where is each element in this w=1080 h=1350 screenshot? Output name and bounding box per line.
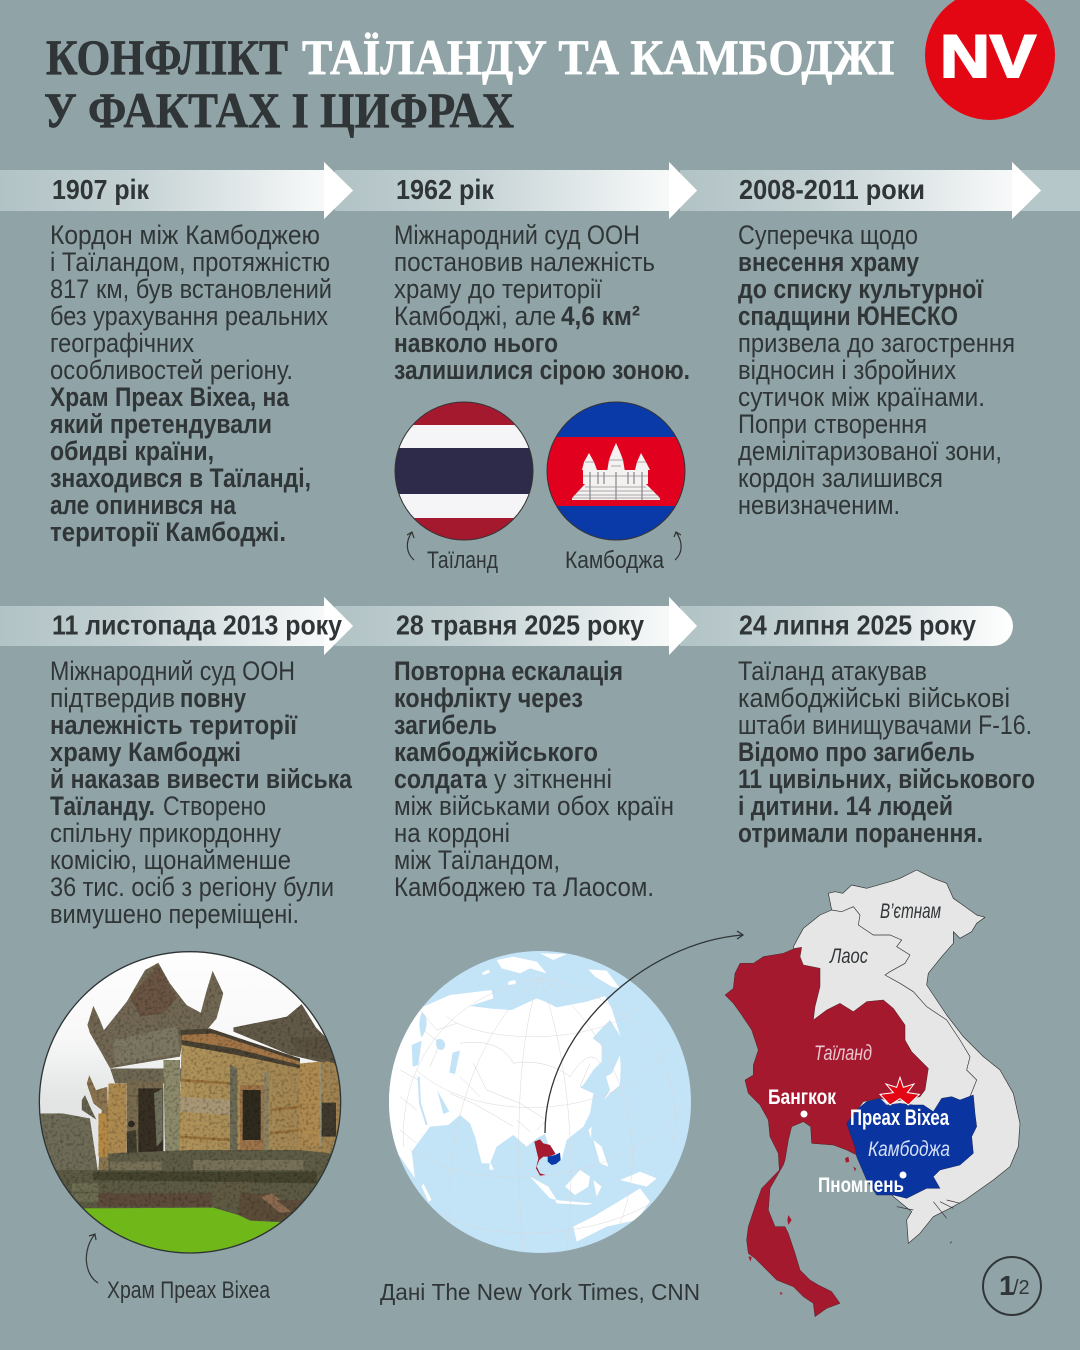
title bbox=[44, 29, 895, 138]
text block: 1907: Кордон між Камбоджею bbox=[50, 220, 320, 250]
timeline arrows row 2 bbox=[0, 597, 1013, 655]
text block: 2013: Таїланду. bbox=[50, 791, 155, 821]
text block: 2013: Створено bbox=[163, 791, 266, 821]
logo: NV bbox=[925, 0, 1055, 120]
text block: 2013: Міжнародний суд ООН bbox=[50, 656, 295, 686]
text block: 2013: повну bbox=[180, 683, 246, 713]
caption: Cambodia: Камбоджа bbox=[565, 547, 665, 574]
text block: 2008-2011: Суперечка щодо bbox=[738, 220, 918, 250]
text block: July 2025: 11 цивільних, військового bbox=[738, 764, 1035, 794]
text block: 1907: але опинився на bbox=[50, 490, 237, 520]
text block: 1907: 817 км, був встановлений bbox=[50, 274, 332, 304]
page number bbox=[983, 1257, 1041, 1315]
text block: 2008-2011: невизначеним. bbox=[738, 490, 900, 520]
text block: 2013: належність території bbox=[50, 710, 298, 740]
labels on map: Таїланд bbox=[814, 1042, 872, 1065]
text block: 2008-2011: призвела до загострення bbox=[738, 328, 1015, 358]
panel: 1907 bbox=[49, 174, 332, 547]
text block: 2008-2011: кордон залишився bbox=[738, 463, 943, 493]
photo: Preah Vihear temple bbox=[38, 951, 342, 1254]
text block: May 2025: між військами обох країн bbox=[394, 791, 674, 821]
page number: 1 bbox=[999, 1270, 1015, 1301]
labels on map bbox=[768, 900, 950, 1197]
page number: /2 bbox=[1013, 1277, 1030, 1299]
islands bbox=[422, 1055, 657, 1242]
caption: Thailand bbox=[407, 532, 498, 574]
right roof bbox=[233, 1004, 338, 1067]
panel: 24 July 2025 bbox=[738, 610, 1035, 848]
land: Eurasia and Africa bbox=[383, 990, 621, 1178]
caption: Cambodia bbox=[565, 532, 681, 574]
text block: 1962: Міжнародний суд ООН bbox=[394, 220, 640, 250]
text block: 1907: знаходився в Таїланді, bbox=[50, 463, 311, 493]
islands bbox=[748, 1157, 856, 1295]
arrow: Cambodia bbox=[674, 532, 681, 560]
text block: 1907: який претендували bbox=[49, 409, 272, 439]
text block: 1907: без урахування реальних bbox=[50, 301, 328, 331]
heading: 1907: 1907 рік bbox=[52, 174, 150, 205]
logo: NV: NV bbox=[940, 23, 1036, 90]
text block: 2013 bbox=[50, 656, 353, 929]
panel: 1962 bbox=[394, 174, 690, 385]
Red Sea bbox=[419, 1077, 427, 1125]
labels on map: Лаос bbox=[828, 945, 868, 968]
text block: May 2025: Повторна ескалація bbox=[394, 656, 623, 686]
panel: 11 November 2013 bbox=[50, 610, 353, 929]
text block: 2008-2011: сутичок між країнами. bbox=[738, 382, 985, 412]
text block: 2008-2011: Попри створення bbox=[738, 409, 927, 439]
panel: 2008-2011 bbox=[738, 174, 1015, 520]
labels on map: Бангкок bbox=[768, 1086, 836, 1109]
text block: 2013: комісію, щонайменше bbox=[50, 845, 291, 875]
text block: 2013: підтвердив bbox=[50, 683, 175, 713]
caption: temple: Храм Преах Віхеа bbox=[107, 1277, 271, 1304]
text block: 1907: обидві країни, bbox=[50, 436, 214, 466]
text block: May 2025: у зіткненні bbox=[494, 764, 612, 794]
panel: 28 May 2025 bbox=[394, 610, 674, 902]
text block: 1962: 4,6 км² bbox=[561, 301, 640, 331]
text block: July 2025 bbox=[738, 656, 1035, 848]
text block: 2008-2011: внесення храму bbox=[738, 247, 919, 277]
right wall bbox=[178, 1037, 342, 1153]
arrow: Thailand bbox=[407, 532, 414, 560]
text block: 1962: навколо нього bbox=[394, 328, 558, 358]
flag: Thailand bbox=[394, 402, 534, 540]
Vietnam and Laos bbox=[793, 870, 1020, 1243]
grass bbox=[84, 1208, 280, 1252]
graticule and borders bbox=[403, 977, 687, 1253]
text block: July 2025: Відомо про загибель bbox=[738, 737, 975, 767]
gable bbox=[87, 963, 223, 1068]
text block: 2008-2011: відносин і збройних bbox=[738, 355, 956, 385]
heading: July 2025: 24 липня 2025 року bbox=[739, 610, 976, 640]
heading: 1962: 1962 рік bbox=[396, 174, 495, 205]
text block: 1962 bbox=[394, 220, 690, 385]
labels on map: В’єтнам bbox=[880, 900, 941, 923]
text block: 2013: вимушено переміщені. bbox=[50, 899, 299, 929]
title: У ФАКТАХ І ЦИФРАХ bbox=[44, 82, 514, 138]
text block: 2008-2011: до списку культурної bbox=[738, 274, 984, 304]
map: Indochina bbox=[725, 870, 1020, 1317]
text block: 1962: залишилися сірою зоною. bbox=[394, 355, 690, 385]
title: КОНФЛІКТ bbox=[46, 29, 288, 85]
text block: May 2025: загибель bbox=[394, 710, 497, 740]
plinth bbox=[108, 1150, 332, 1170]
mini Thailand bbox=[534, 1139, 556, 1176]
title: ТАЇЛАНДУ ТА КАМБОДЖІ bbox=[302, 29, 895, 85]
heading: 2013: 11 листопада 2013 року bbox=[52, 610, 342, 640]
labels on map: Камбоджа bbox=[868, 1138, 950, 1161]
timeline arrows row 1 bbox=[0, 162, 1080, 219]
flag: Cambodia bbox=[546, 402, 686, 540]
globe bbox=[389, 951, 691, 1253]
text block: 1907: і Таїландом, протяжністю bbox=[50, 247, 330, 277]
text block: July 2025: і дитини. 14 людей bbox=[738, 791, 953, 821]
text block: 2013: й наказав вивести війська bbox=[50, 764, 353, 794]
source line: Дані The New York Times, CNN bbox=[380, 1279, 700, 1305]
Arctic islands bbox=[482, 953, 620, 988]
heading: 2008-2011: 2008-2011 роки bbox=[739, 174, 925, 205]
arrow: globe to map bbox=[545, 931, 743, 1133]
caption: temple bbox=[86, 1234, 271, 1304]
Thailand bbox=[725, 947, 928, 1317]
seas bbox=[412, 1013, 460, 1114]
text block: July 2025: штаби винищувачами F-16. bbox=[738, 710, 1032, 740]
text block: 1907: території Камбоджі. bbox=[50, 517, 286, 547]
portal bbox=[110, 1068, 182, 1083]
text block: 1907: географічних bbox=[50, 328, 194, 358]
text block: 2013: храму Камбоджі bbox=[50, 737, 241, 767]
text block: 1907: Храм Преах Віхеа, на bbox=[50, 382, 290, 412]
mini Cambodia bbox=[548, 1153, 561, 1165]
text block: 1907: особливостей регіону. bbox=[50, 355, 293, 385]
heading: May 2025: 28 травня 2025 року bbox=[396, 610, 644, 640]
text block: 2008-2011 bbox=[738, 220, 1015, 520]
text block: May 2025: солдата bbox=[394, 764, 488, 794]
labels on map: Преах Віхеа bbox=[850, 1105, 950, 1130]
Cambodia bbox=[847, 1095, 977, 1198]
caption: Thailand: Таїланд bbox=[427, 547, 498, 574]
icon: Angkor Wat bbox=[572, 443, 660, 500]
text block: May 2025 bbox=[394, 656, 674, 902]
text block: May 2025: на кордоні bbox=[394, 818, 510, 848]
text block: May 2025: камбоджійського bbox=[394, 737, 598, 767]
icon: explosion bbox=[880, 1077, 919, 1105]
text block: 1962: Камбоджі, але bbox=[394, 301, 556, 331]
delta notches bbox=[897, 1200, 960, 1243]
text block: May 2025: між Таїландом, bbox=[394, 845, 560, 875]
text block: July 2025: отримали поранення. bbox=[738, 818, 983, 848]
text block: 1907 bbox=[49, 220, 332, 547]
text block: May 2025: конфлікту через bbox=[394, 683, 583, 713]
text block: 2013: спільну прикордонну bbox=[50, 818, 281, 848]
arrow: temple bbox=[86, 1234, 98, 1283]
text block: July 2025: камбоджійські військові bbox=[738, 683, 1010, 713]
text block: 1962: постановив належність bbox=[394, 247, 655, 277]
text block: 2008-2011: демілітаризованої зони, bbox=[738, 436, 1002, 466]
text block: 2013: 36 тис. осіб з регіону були bbox=[50, 872, 334, 902]
labels on map: Пномпень bbox=[818, 1174, 904, 1197]
text block: 2008-2011: спадщини ЮНЕСКО bbox=[738, 301, 958, 331]
Vietnam-Laos border bbox=[832, 907, 977, 1097]
text block: May 2025: Камбоджею та Лаосом. bbox=[394, 872, 654, 902]
text block: 1962: храму до території bbox=[394, 274, 602, 304]
text block: July 2025: Таїланд атакував bbox=[738, 656, 927, 686]
